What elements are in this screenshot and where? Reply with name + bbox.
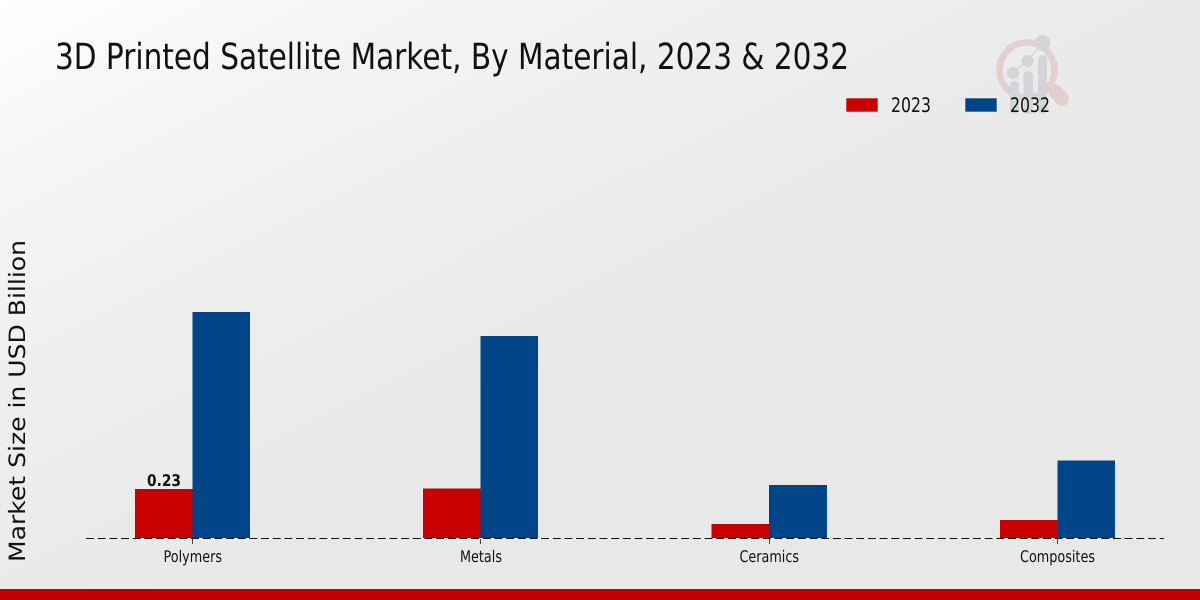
x-axis category labels	[164, 547, 1095, 566]
x-axis category labels: Polymers	[164, 547, 222, 566]
legend item: 2032	[965, 93, 1050, 117]
legend	[846, 93, 1050, 117]
group: Metals	[423, 336, 538, 539]
value label: 0.23	[147, 471, 181, 490]
x axis baseline	[86, 538, 1164, 544]
bar chart	[86, 312, 1164, 566]
group: Composites	[1000, 460, 1115, 539]
legend item: 2032: 2032	[1010, 93, 1050, 117]
legend item: 2023: 2023	[891, 93, 931, 117]
group: Ceramics	[712, 485, 827, 539]
x-axis category labels: Ceramics	[740, 547, 799, 566]
footer bar	[0, 589, 1200, 600]
legend item: 2023	[846, 93, 931, 117]
group: Polymers	[135, 312, 250, 539]
y-axis title: Market Size in USD Billion	[5, 240, 31, 562]
title: 3D Printed Satellite Market, By Material, 2023 & 2032	[55, 37, 849, 78]
icon: watermark logo	[1000, 35, 1062, 114]
x-axis category labels: Metals	[460, 547, 502, 566]
x-axis category labels: Composites	[1020, 547, 1095, 566]
